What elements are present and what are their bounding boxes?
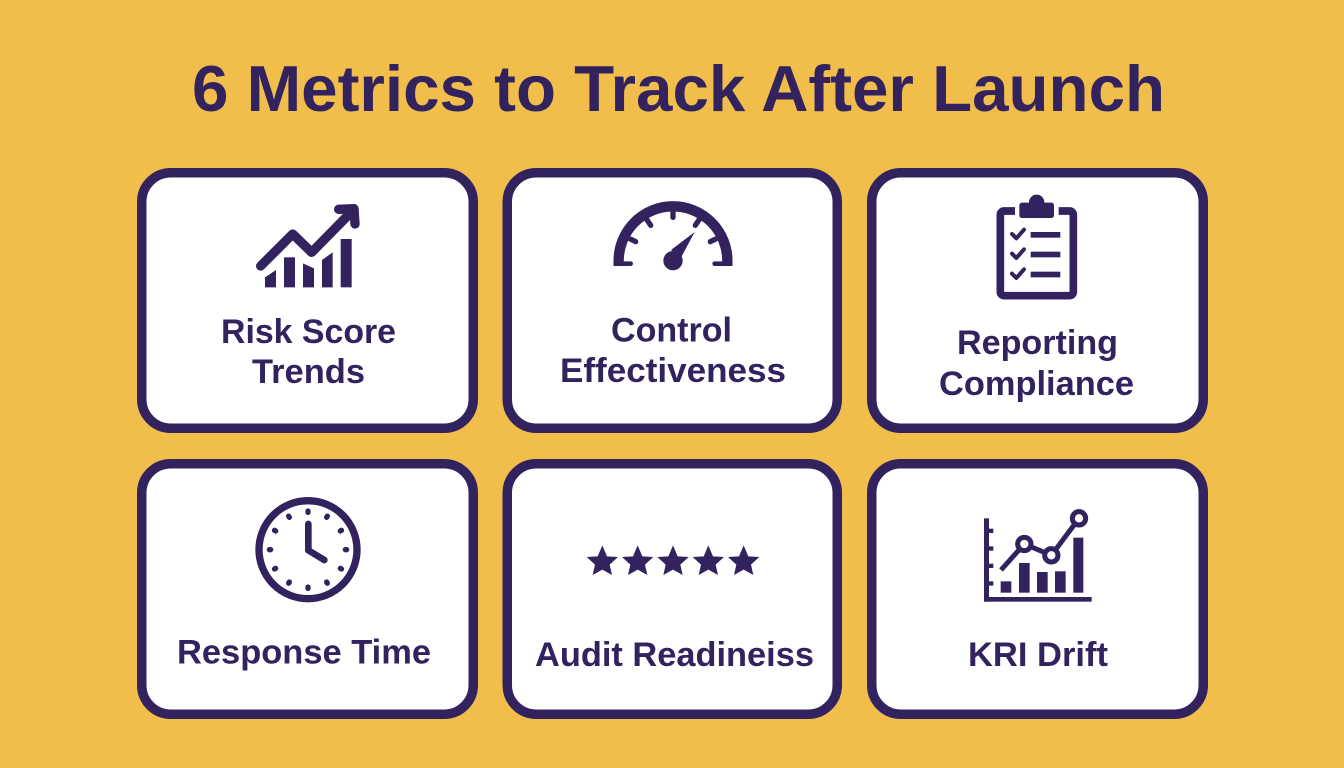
panel: KRI Drift	[872, 464, 1203, 714]
label: Control Effectiveness: Effectiveness	[560, 352, 786, 390]
icon: clipboard checklist	[1000, 195, 1073, 296]
label: Response Time: Response Time	[177, 634, 431, 672]
panel: Response Time	[142, 464, 473, 714]
label: Reporting Compliance: Compliance	[939, 365, 1134, 403]
label: Risk Score Trends: Risk Score	[221, 313, 396, 351]
icon: five stars	[587, 545, 759, 575]
panel: Risk Score Trends	[142, 173, 473, 428]
icon: clock	[259, 501, 357, 599]
label: Reporting Compliance	[939, 324, 1134, 403]
label: Risk Score Trends: Trends	[252, 353, 365, 391]
icon: speedometer gauge	[614, 206, 732, 270]
label: Control Effectiveness: Control	[611, 312, 732, 350]
panel: Audit Readineiss	[507, 464, 837, 714]
label: Audit Readineiss: Audit Readineiss	[535, 636, 814, 674]
icon: chart with line and bars	[984, 512, 1092, 602]
label: KRI Drift: KRI Drift	[968, 636, 1108, 674]
title: 6 Metrics to Track After Launch	[192, 52, 1165, 125]
icon: rising trend arrow with bars	[261, 209, 355, 287]
panel: Reporting Compliance	[872, 173, 1203, 428]
label: Reporting Compliance: Reporting	[957, 324, 1118, 362]
panel: Control Effectiveness	[507, 173, 837, 428]
label: Risk Score Trends	[221, 313, 396, 391]
label: Control Effectiveness	[560, 312, 786, 390]
